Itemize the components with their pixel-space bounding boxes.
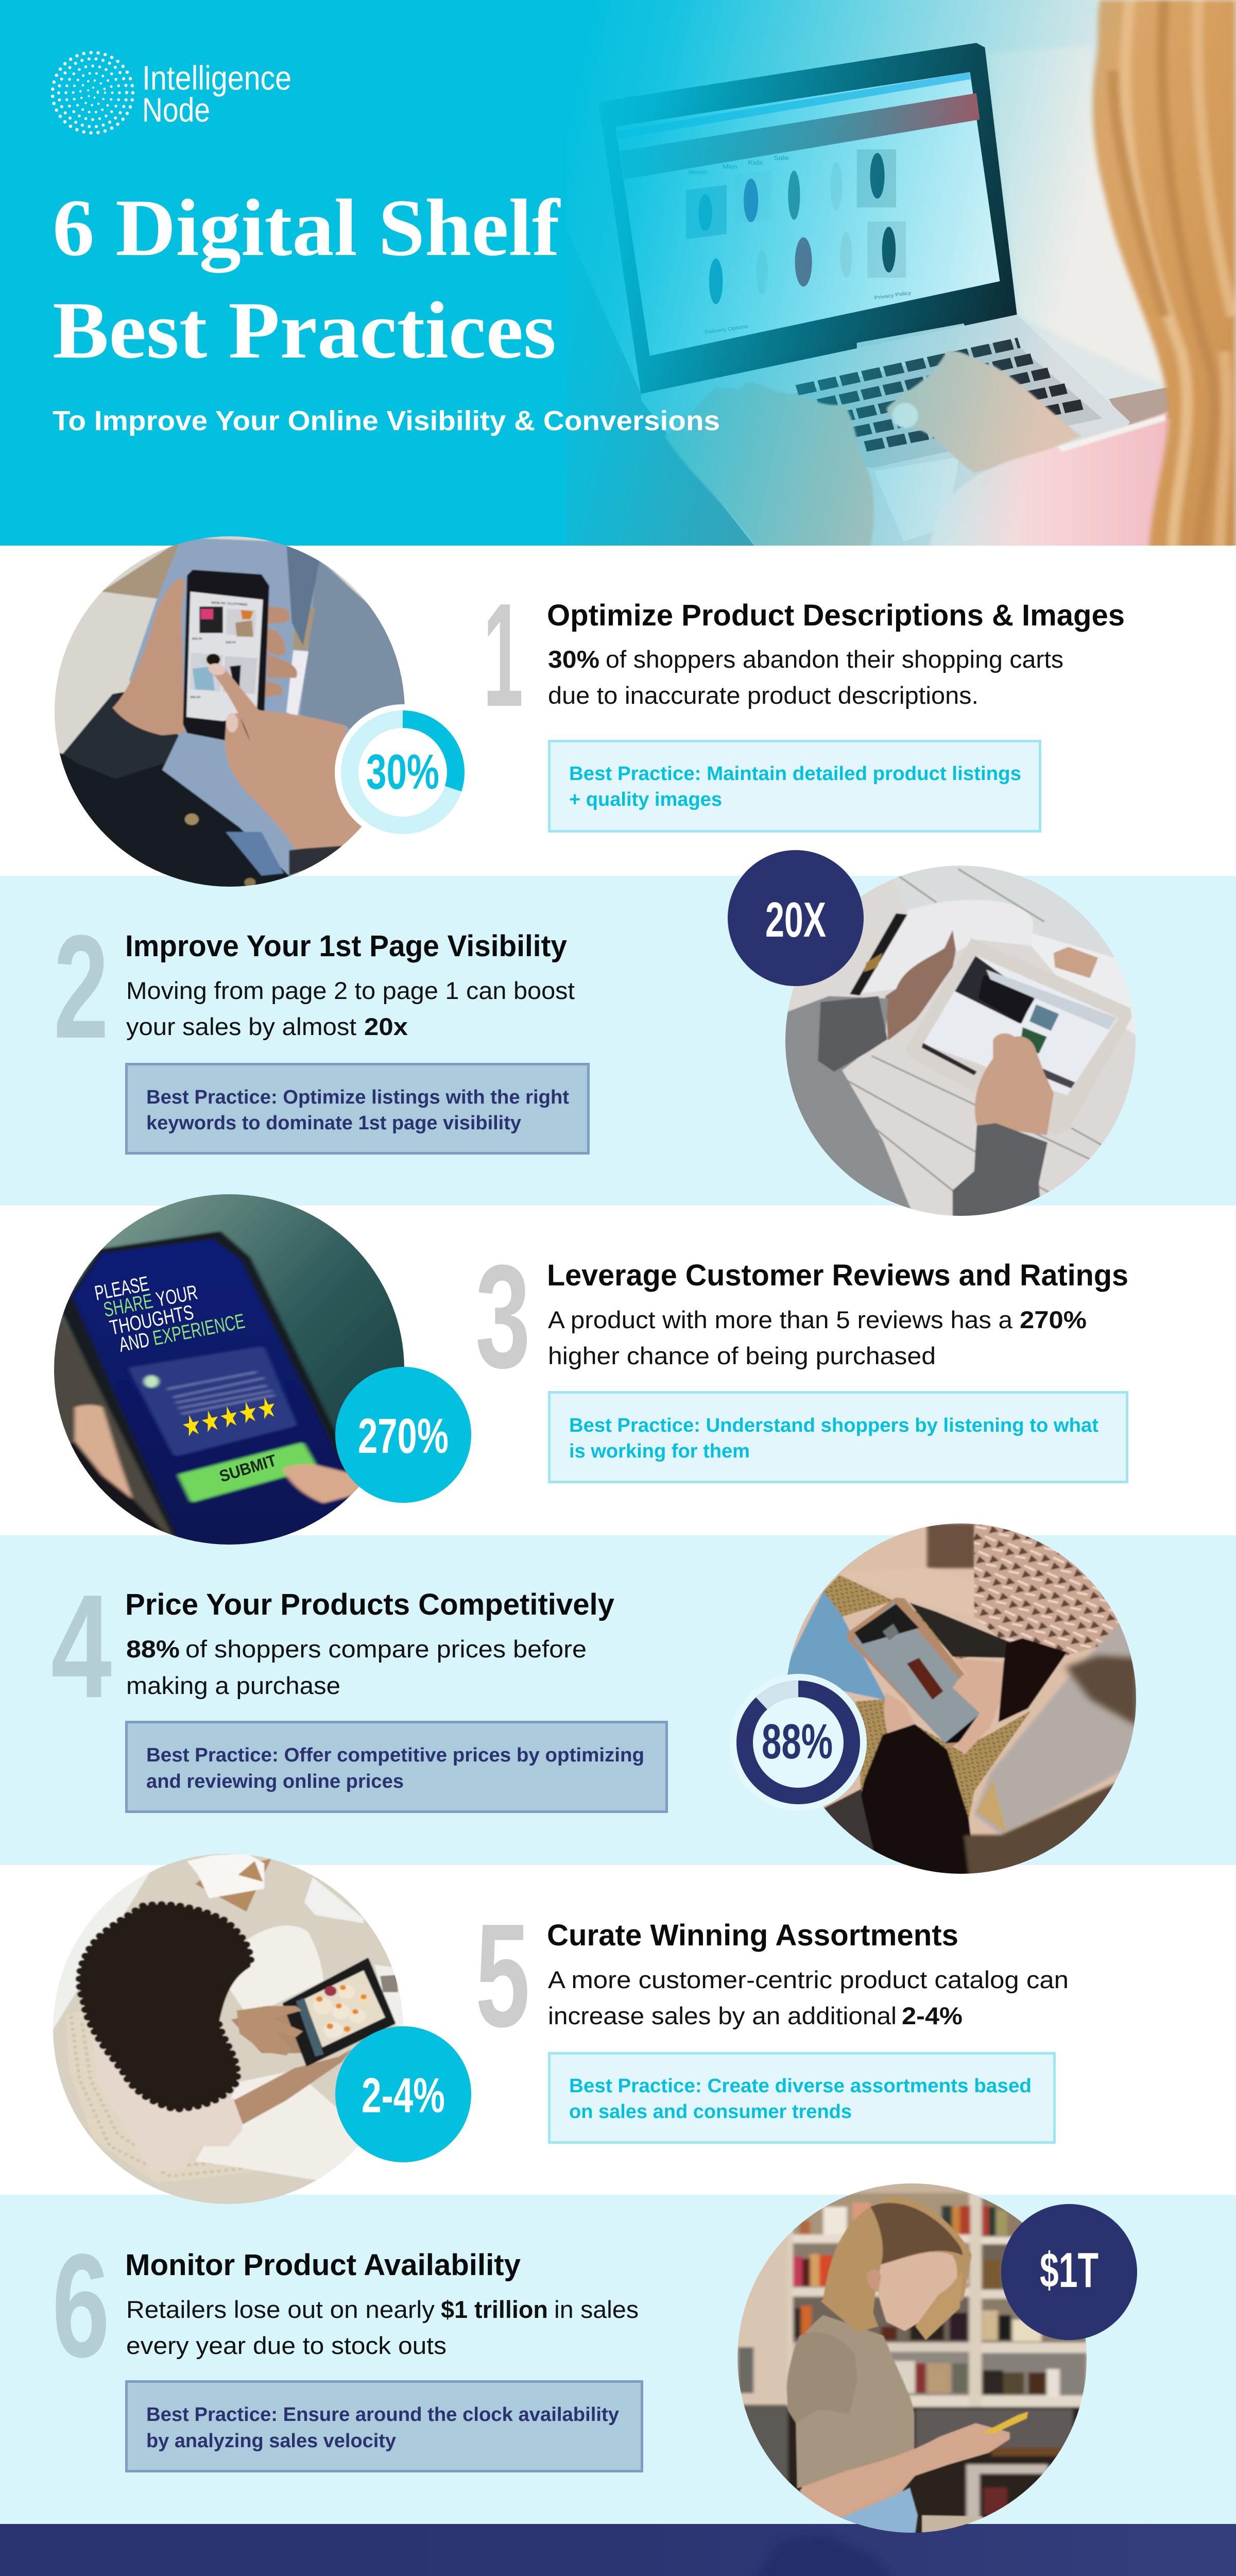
best practice callout — [127, 1064, 588, 1153]
heading: Improve Your 1st Page Visibility — [125, 929, 567, 963]
hero photo: woman typing on a laptop: Men — [723, 163, 737, 170]
best practice callout — [549, 741, 1040, 832]
star rating: ★★★★★ — [179, 1390, 280, 1444]
body text: 270% — [1020, 1306, 1087, 1333]
numeral 4: 4 — [51, 1564, 112, 1728]
woman — [786, 2196, 1028, 2535]
best practice callout: Best Practice: Maintain detailed product listings — [569, 763, 1021, 785]
body text: 30% — [548, 646, 599, 673]
body text: every year due to stock outs — [126, 2332, 447, 2359]
photo: man using tablet at table — [775, 857, 1152, 1229]
photo: hands holding phone: $38.00 — [226, 641, 236, 645]
body text: 88% — [126, 1635, 180, 1663]
best practice callout: Best Practice: Understand shoppers by listening to what — [569, 1415, 1098, 1436]
badge: $1T: $1T — [1040, 2243, 1098, 2298]
review prompt text: SHARE YOUR — [101, 1281, 199, 1321]
badge: 2-4% — [335, 2026, 471, 2162]
best practice callout: on sales and consumer trends — [569, 2101, 852, 2123]
hero header — [53, 0, 1236, 551]
review prompt text — [93, 1272, 247, 1357]
numeral 2: 2 — [54, 904, 109, 1069]
hero title — [54, 198, 561, 359]
hero title: 6 Digital Shelf — [53, 183, 561, 273]
step 6: product availability — [52, 2179, 1137, 2547]
logo: Intelligence Node — [53, 53, 291, 133]
footer background — [0, 2524, 1236, 2576]
review prompt text: AND EXPERIENCE — [117, 1310, 247, 1357]
hero title: Best Practices — [53, 285, 556, 376]
photo: hands holding phone: $56.00 — [191, 696, 201, 699]
step 4: competitive pricing — [51, 1520, 1152, 1888]
badge: 20X — [728, 850, 864, 986]
body text: increase sales by an additional — [548, 2002, 897, 2029]
heading: Leverage Customer Reviews and Ratings — [547, 1259, 1128, 1292]
photo: woman with curly hair using tablet — [46, 1850, 419, 2217]
footer photo: man with laptop — [0, 2533, 1139, 2576]
hero photo: woman typing on a laptop: Delivery Options — [705, 324, 749, 335]
photo: hands holding phone: $35.00 — [192, 638, 202, 640]
logo: Intelligence Node: Intelligence — [142, 59, 291, 97]
best practice callout: by analyzing sales velocity — [146, 2430, 396, 2452]
hero photo: woman typing on a laptop: Sale — [774, 155, 789, 161]
body text: of shoppers compare prices before — [185, 1635, 587, 1663]
step 5: winning assortments — [46, 1850, 1069, 2217]
best practice callout: Best Practice: Create diverse assortments based — [569, 2075, 1032, 2097]
best practice callout — [549, 2054, 1055, 2142]
step 1: product descriptions and images — [46, 531, 1125, 899]
photo: woman in bookstore with phone — [731, 2179, 1099, 2547]
hero photo: woman typing on a laptop: Privacy Policy — [874, 290, 912, 301]
submit label: SUBMIT — [217, 1451, 279, 1486]
best practice callout: Best Practice: Optimize listings with the right — [146, 1087, 569, 1108]
best practice callout: is working for them — [569, 1440, 750, 1462]
numeral 6: 6 — [52, 2223, 110, 2388]
photo: shopper holding phone with dress — [775, 1520, 1152, 1888]
body text: making a purchase — [126, 1672, 340, 1699]
photo: phone with review screen — [47, 1189, 418, 1554]
body text — [126, 2296, 639, 2359]
body text — [126, 1635, 587, 1699]
body text — [548, 1966, 1069, 2029]
cyan gradient overlay — [566, 0, 1113, 546]
body text: in sales — [554, 2296, 639, 2323]
hero photo: woman typing on a laptop — [566, 0, 1236, 551]
best practice callout — [549, 1392, 1127, 1482]
hero photo: woman typing on a laptop: Kids — [748, 159, 763, 166]
donut: 30%: 30% — [366, 744, 439, 800]
badge: 270% — [335, 1367, 471, 1503]
best practice callout — [127, 1722, 666, 1811]
body text: 2-4% — [902, 2002, 963, 2029]
heading: Price Your Products Competitively — [125, 1588, 614, 1621]
heading: Curate Winning Assortments — [547, 1919, 958, 1952]
hero photo: woman typing on a laptop: Women — [688, 168, 708, 175]
body text: $1 trillion — [441, 2296, 548, 2323]
logo: Intelligence Node: Node — [142, 91, 210, 129]
best practice callout: keywords to dominate 1st page visibility — [146, 1112, 521, 1134]
body text: A more customer-centric product catalog can — [548, 1966, 1069, 1993]
badge: 20X: 20X — [765, 892, 826, 947]
review prompt text: THOUGHTS — [108, 1301, 196, 1340]
body text — [548, 1306, 1087, 1369]
step 3: customer reviews and ratings — [47, 1189, 1128, 1554]
body text: higher chance of being purchased — [548, 1342, 936, 1369]
numeral 3: 3 — [475, 1234, 530, 1399]
donut: 88%: 88% — [762, 1714, 833, 1769]
best practice callout — [127, 2381, 642, 2471]
body text: 20x — [364, 1013, 408, 1040]
body text — [548, 646, 1063, 709]
heading: Monitor Product Availability — [125, 2248, 521, 2282]
donut: 30% — [335, 704, 471, 840]
best practice callout: + quality images — [569, 789, 722, 810]
heading: Optimize Product Descriptions & Images — [547, 599, 1125, 632]
step 1: product descriptions and images: 1 — [483, 572, 523, 737]
best practice callout: Best Practice: Ensure around the clock availability — [146, 2404, 619, 2426]
body text: due to inaccurate product descriptions. — [548, 682, 978, 709]
badge: 270%: 270% — [358, 1409, 449, 1464]
numeral 5: 5 — [475, 1893, 530, 2058]
body text — [126, 977, 575, 1040]
badge: $1T — [1001, 2204, 1137, 2340]
badge: 2-4%: 2-4% — [362, 2068, 445, 2123]
photo: hands holding phone: NEW IN: CLOTHING — [211, 601, 248, 606]
body text: A product with more than 5 reviews has a — [548, 1306, 1013, 1333]
best practice callout: and reviewing online prices — [146, 1771, 404, 1792]
photo: hands holding phone — [46, 531, 433, 899]
body text: your sales by almost — [126, 1013, 356, 1040]
body text: Retailers lose out on nearly — [126, 2296, 435, 2323]
review prompt text: PLEASE — [93, 1272, 151, 1305]
body text: of shoppers abandon their shopping carts — [606, 646, 1063, 673]
body text: Moving from page 2 to page 1 can boost — [126, 977, 575, 1004]
step 2: first page visibility — [54, 850, 1152, 1229]
donut: 88% — [723, 1667, 874, 1818]
hero subtitle: To Improve Your Online Visibility & Conversions — [53, 405, 720, 436]
best practice callout: Best Practice: Offer competitive prices by optimizing — [146, 1744, 644, 1766]
